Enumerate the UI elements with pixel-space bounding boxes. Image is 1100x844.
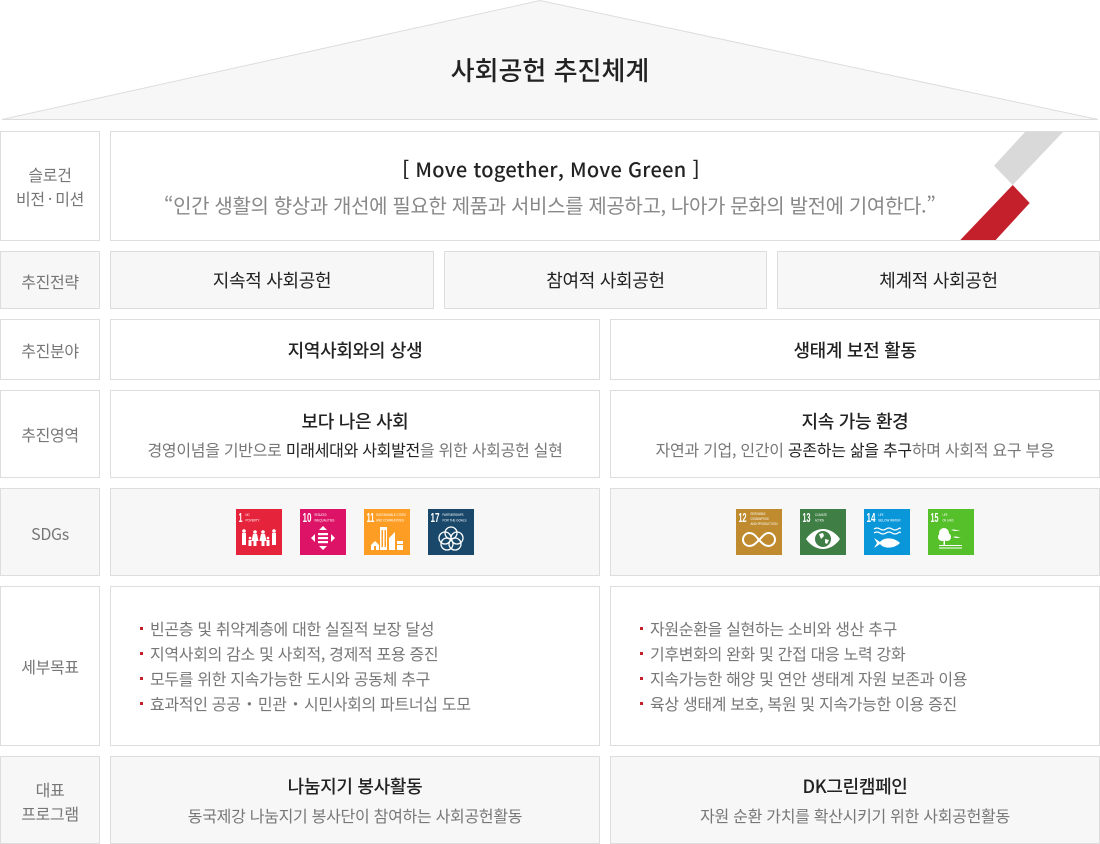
area 1: 경영이념을 기반으로 미래세대와 사회발전을 위한 사회공헌 실현: [147, 437, 563, 461]
panel: goals left: [110, 586, 600, 746]
icon: SDG 12: [736, 509, 782, 555]
row label: strategy: 추진전략: [21, 268, 79, 292]
program 1: 나눔지기 봉사활동: [288, 773, 422, 799]
row label: field: [0, 319, 100, 380]
goals right list: [640, 616, 967, 715]
row label: slogan: [0, 131, 100, 241]
row label: goals: [0, 586, 100, 746]
strategy 3: 체계적 사회공헌: [879, 267, 998, 293]
panel: SDGs left: [110, 488, 600, 576]
icon: SDG 10: [300, 509, 346, 555]
icon: SDG 1: POVERTY: [246, 518, 260, 522]
icon: SDG 15: LIFE: [942, 513, 948, 517]
goals right list: 기후변화의 완화 및 간접 대응 노력 강화: [650, 641, 905, 665]
row label: area: 추진영역: [21, 422, 79, 446]
field 2: 생태계 보전 활동: [793, 336, 917, 362]
goals left list: 효과적인 공공・민관・시민사회의 파트너십 도모: [150, 691, 471, 715]
program 2: [610, 756, 1100, 844]
icon: SDG 15: 15: [930, 510, 938, 525]
row label: programs: 대표: [36, 776, 64, 800]
strategy 3: [777, 251, 1100, 309]
roof with title: [2, 0, 1098, 120]
icon: slash mark: [960, 132, 1063, 240]
panel: goals right: [610, 586, 1100, 746]
icon: SDG 17: FOR THE GOALS: [442, 518, 467, 522]
icon: SDG 1: [236, 509, 282, 555]
slogan text: “인간 생활의 향상과 개선에 필요한 제품과 서비스를 제공하고, 나아가 문화의 발전에 기여한다.”: [164, 190, 935, 219]
title: 사회공헌 추진체계: [451, 51, 649, 88]
icon: SDG 13: CLIMATE: [815, 513, 828, 517]
icon: SDG 17: [428, 509, 474, 555]
icon: SDG 14: [864, 509, 910, 555]
row label: slogan: 비전 · 미션: [16, 186, 84, 210]
icon: SDG 10: REDUCED: [314, 513, 327, 517]
icon: SDG 14: BELOW WATER: [878, 518, 901, 522]
panel: slogan: [110, 131, 1100, 241]
goals right list: 육상 생태계 보호, 복원 및 지속가능한 이용 증진: [650, 691, 957, 715]
row label: strategy: [0, 251, 100, 309]
icon: SDG 12: 12: [738, 510, 746, 525]
icon: SDG 10: INEQUALITIES: [314, 518, 335, 522]
program 2: DK그린캠페인: [802, 773, 908, 799]
icon: SDG 1: 1: [238, 510, 242, 525]
field 2: [610, 319, 1100, 380]
row label: SDGs: SDGs: [31, 520, 69, 544]
panel: SDGs right: [610, 488, 1100, 576]
row label: slogan: 슬로건: [28, 162, 72, 186]
icon: SDG 11: 11: [366, 510, 374, 525]
icon: SDG 15: ON LAND: [942, 518, 954, 522]
icon: SDG 11: [364, 509, 410, 555]
field 1: [110, 319, 600, 380]
icon: SDG 17: PARTNERSHIPS: [442, 513, 464, 517]
strategy 1: 지속적 사회공헌: [213, 267, 331, 293]
strategy 2: [444, 251, 767, 309]
row label: area: [0, 390, 100, 478]
icon: SDG 14: 14: [866, 510, 876, 525]
icon: SDG 12: CONSUMPTION: [750, 517, 769, 521]
icon: SDG 11: SUSTAINABLE CITIES: [376, 513, 407, 517]
icon: SDG 12: RESPONSIBLE: [750, 512, 766, 516]
icon: SDG 10: 10: [302, 510, 312, 525]
strategy 2: 참여적 사회공헌: [546, 267, 665, 293]
icon: SDG 12: AND PRODUCTION: [750, 522, 778, 526]
icon: SDG 11: AND COMMUNITIES: [376, 518, 405, 522]
slogan heading: [ Move together, Move Green ]: [402, 154, 700, 183]
program 2: 자원 순환 가치를 확산시키기 위한 사회공헌활동: [700, 803, 1010, 827]
strategy 1: [110, 251, 434, 309]
icon: SDG 14: LIFE: [878, 513, 884, 517]
area 2: [610, 390, 1100, 478]
goals right list: 지속가능한 해양 및 연안 생태계 자원 보존과 이용: [650, 666, 967, 690]
icon: SDG 1: NO: [246, 513, 250, 517]
row label: goals: 세부목표: [21, 654, 79, 678]
area 2: 자연과 기업, 인간이 공존하는 삶을 추구하며 사회적 요구 부응: [656, 437, 1054, 461]
icon: SDG 13: [800, 509, 846, 555]
area 1: 보다 나은 사회: [302, 408, 408, 434]
area 2: 지속 가능 환경: [802, 408, 908, 434]
icon: SDG 17: 17: [430, 510, 440, 525]
row label: SDGs: [0, 488, 100, 576]
program 1: 동국제강 나눔지기 봉사단이 참여하는 사회공헌활동: [188, 803, 522, 827]
goals left list: [140, 616, 471, 715]
goals left list: 빈곤층 및 취약계층에 대한 실질적 보장 달성: [150, 616, 434, 640]
row label: programs: [0, 756, 100, 844]
row label: field: 추진분야: [21, 338, 79, 362]
program 1: [110, 756, 600, 844]
row label: programs: 프로그램: [21, 800, 79, 824]
goals left list: 모두를 위한 지속가능한 도시와 공동체 추구: [150, 666, 430, 690]
goals right list: 자원순환을 실현하는 소비와 생산 추구: [650, 616, 897, 640]
icon: SDG 13: 13: [802, 510, 810, 525]
icon: SDG 13: ACTION: [815, 518, 824, 522]
area 1: [110, 390, 600, 478]
icon: SDG 15: [928, 509, 974, 555]
field 1: 지역사회와의 상생: [288, 336, 422, 362]
goals left list: 지역사회의 감소 및 사회적, 경제적 포용 증진: [150, 641, 438, 665]
